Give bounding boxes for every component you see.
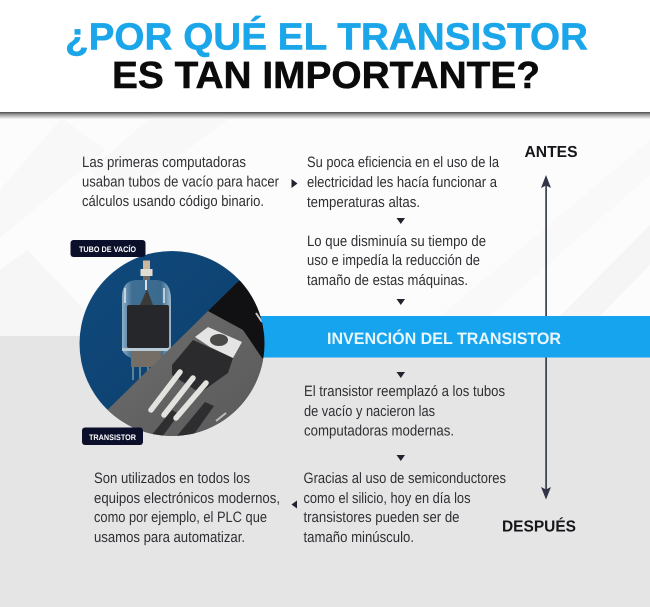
text: equipos electrónicos: como por ejemplo, el PLC que — [94, 509, 267, 526]
arrow: to efficiency — [292, 179, 298, 188]
text: semiconductores: Gracias al uso de semiconductores — [304, 470, 506, 487]
text: primeras computadoras: usaban tubos de vacío para hacer — [82, 174, 279, 190]
title: ¿POR QUÉ EL TRANSISTOR — [65, 16, 588, 58]
band: invención del transistor: INVENCIÓN DEL TRANSISTOR — [327, 329, 561, 348]
text: reemplazó: de vacío y nacieron las — [304, 403, 435, 420]
text: disminuía: uso e impedía la reducción de — [307, 252, 480, 269]
text: equipos electrónicos — [94, 470, 280, 546]
text: disminuía — [307, 233, 486, 289]
text: primeras computadoras — [82, 154, 279, 210]
text: equipos electrónicos: equipos electrónicos modernos, — [94, 490, 280, 507]
tag: tubo de vacío: TUBO DE VACÍO — [79, 244, 136, 254]
tag: transistor: TRANSISTOR — [89, 433, 136, 442]
arrow: down 2 — [396, 299, 405, 305]
timeline arrow: antes — [541, 175, 551, 316]
tag: transistor — [82, 428, 143, 445]
text: primeras computadoras: Las primeras computadoras — [82, 154, 246, 171]
text: primeras computadoras: cálculos usando código binario. — [82, 193, 264, 210]
arrow: down 4 — [396, 455, 405, 461]
text: disminuía: tamaño de estas máquinas. — [307, 272, 468, 289]
icon: transistor — [151, 327, 242, 418]
text: equipos electrónicos: Son utilizados en todos los — [94, 470, 250, 487]
text: poca eficiencia: temperaturas altas. — [307, 194, 420, 211]
text: reemplazó: computadoras modernas. — [304, 422, 454, 440]
text: semiconductores: transistores pueden ser de — [304, 509, 460, 526]
label: después: DESPUÉS — [502, 516, 576, 536]
text: semiconductores: como el silicio, hoy en día los — [304, 490, 470, 507]
arrow: down 3 — [396, 372, 405, 378]
icon: vacuum tube — [122, 260, 171, 382]
text: semiconductores — [304, 470, 506, 546]
text: semiconductores: tamaño minúsculo. — [304, 529, 414, 546]
arrow: down 1 — [396, 218, 405, 224]
background: upper panel — [0, 112, 650, 336]
text: poca eficiencia: Su poca eficiencia en el uso de la — [307, 154, 500, 171]
title: ES TAN IMPORTANTE? — [112, 55, 540, 97]
background: lower panel — [0, 336, 650, 607]
title — [65, 16, 588, 97]
icon: transistor surface — [108, 280, 264, 436]
text: reemplazó — [304, 383, 505, 440]
photo: vacuum tube and transistor — [79, 250, 270, 437]
label: antes: ANTES — [524, 144, 578, 161]
text: poca eficiencia — [307, 154, 500, 211]
text: poca eficiencia: electricidad les hacía funcionar a — [307, 174, 498, 191]
arrow: to PLC — [292, 500, 297, 508]
text: disminuía: Lo que disminuía su tiempo de — [307, 233, 486, 250]
band: invención del transistor — [240, 316, 650, 358]
tag: tubo de vacío — [70, 240, 146, 257]
timeline arrow: después — [541, 357, 551, 500]
text: equipos electrónicos: usamos para automatizar. — [94, 529, 245, 546]
text: reemplazó: El transistor reemplazó a los tubos — [304, 383, 505, 400]
header band — [0, 0, 650, 119]
